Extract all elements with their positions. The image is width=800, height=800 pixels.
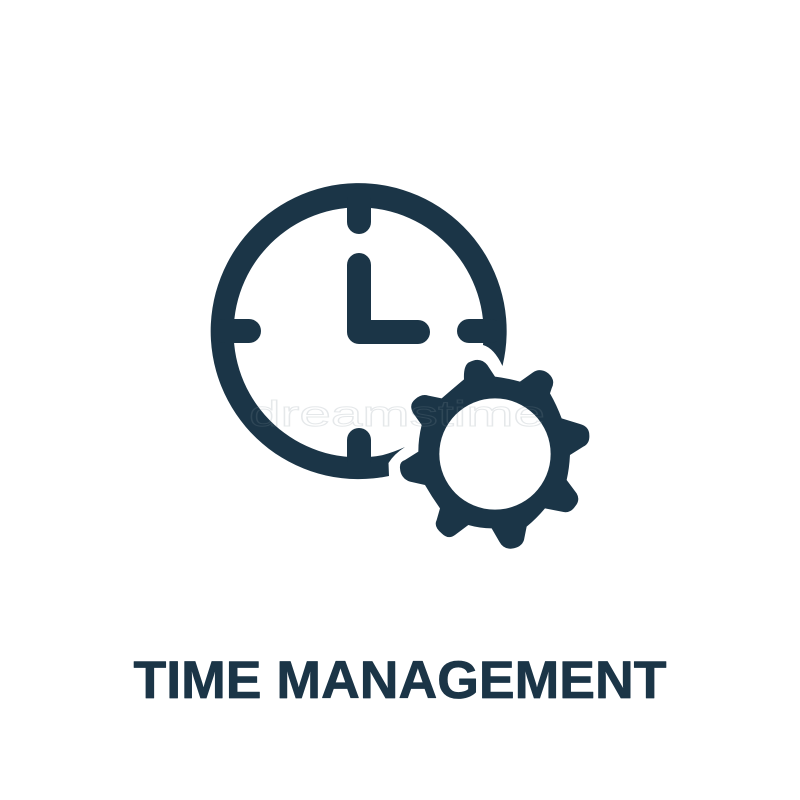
icon: clock face ring — [211, 183, 507, 479]
title: TIME MANAGEMENT — [134, 651, 666, 710]
icon: clock hands — [359, 265, 418, 332]
watermark: dreamstime — [249, 393, 545, 434]
icon: clock tick marks — [225, 200, 490, 460]
icon: clock with gear — [211, 183, 589, 549]
gear hub — [439, 398, 551, 510]
icon: gear — [400, 360, 589, 549]
